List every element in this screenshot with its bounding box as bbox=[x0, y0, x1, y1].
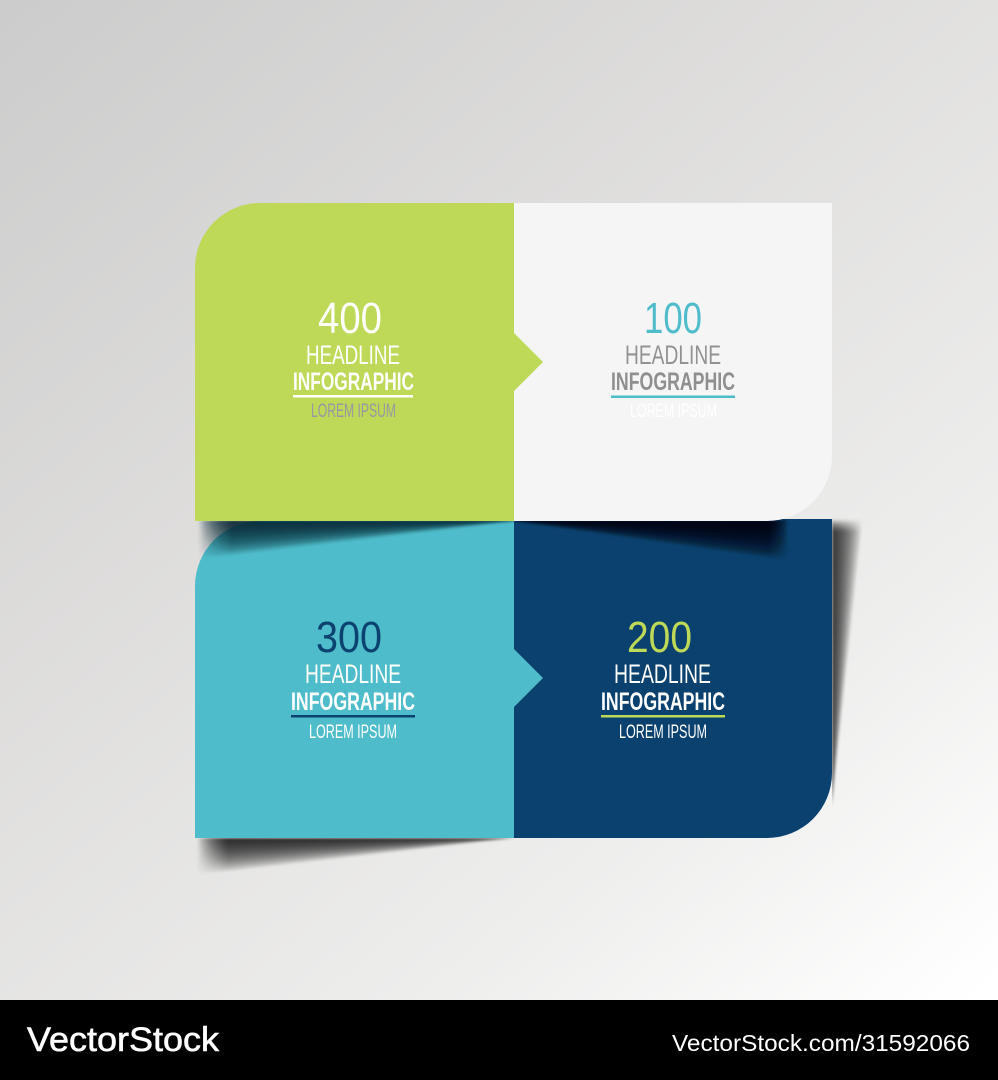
panel: 300 teal bbox=[195, 520, 514, 838]
number 300: 300 bbox=[316, 613, 382, 662]
underline bbox=[293, 395, 413, 398]
underline bbox=[291, 715, 415, 718]
infographic: INFOGRAPHIC bbox=[611, 368, 735, 396]
footer url: VectorStock.com/31592066 bbox=[672, 1030, 970, 1056]
lorem ipsum: LOREM IPSUM bbox=[630, 401, 717, 422]
infographic: INFOGRAPHIC bbox=[293, 368, 414, 396]
panel: 100 white bbox=[514, 203, 832, 521]
text block: 300 bbox=[291, 613, 415, 743]
underline bbox=[611, 396, 735, 398]
panel: 200 navy bbox=[514, 519, 832, 838]
headline: HEADLINE bbox=[614, 659, 711, 689]
headline: HEADLINE bbox=[306, 340, 400, 370]
lorem ipsum: LOREM IPSUM bbox=[311, 401, 396, 422]
shadow: fold on navy panel bbox=[514, 520, 790, 560]
number 200: 200 bbox=[627, 613, 692, 662]
text block: 200 bbox=[601, 613, 725, 743]
arrow: green to white bbox=[514, 333, 543, 391]
number 100: 100 bbox=[644, 294, 702, 343]
number 400: 400 bbox=[318, 294, 382, 343]
text block: 100 bbox=[611, 294, 735, 422]
headline: HEADLINE bbox=[625, 340, 721, 370]
lorem ipsum: LOREM IPSUM bbox=[309, 722, 397, 743]
shadow: fold on teal panel bbox=[198, 520, 514, 558]
footer brand: VectorStock bbox=[27, 1021, 220, 1059]
underline bbox=[601, 715, 725, 718]
headline: HEADLINE bbox=[305, 659, 401, 689]
shadow: below teal panel bbox=[197, 838, 514, 874]
footer bar bbox=[0, 1000, 998, 1080]
text block: 400 bbox=[293, 294, 414, 422]
infographic: INFOGRAPHIC bbox=[291, 688, 415, 716]
shadow: right of navy panel bbox=[832, 519, 862, 805]
arrow: teal tip over navy bbox=[514, 649, 543, 707]
lorem ipsum: LOREM IPSUM bbox=[619, 722, 707, 743]
infographic: INFOGRAPHIC bbox=[601, 688, 725, 716]
panel: 400 green bbox=[195, 203, 514, 521]
